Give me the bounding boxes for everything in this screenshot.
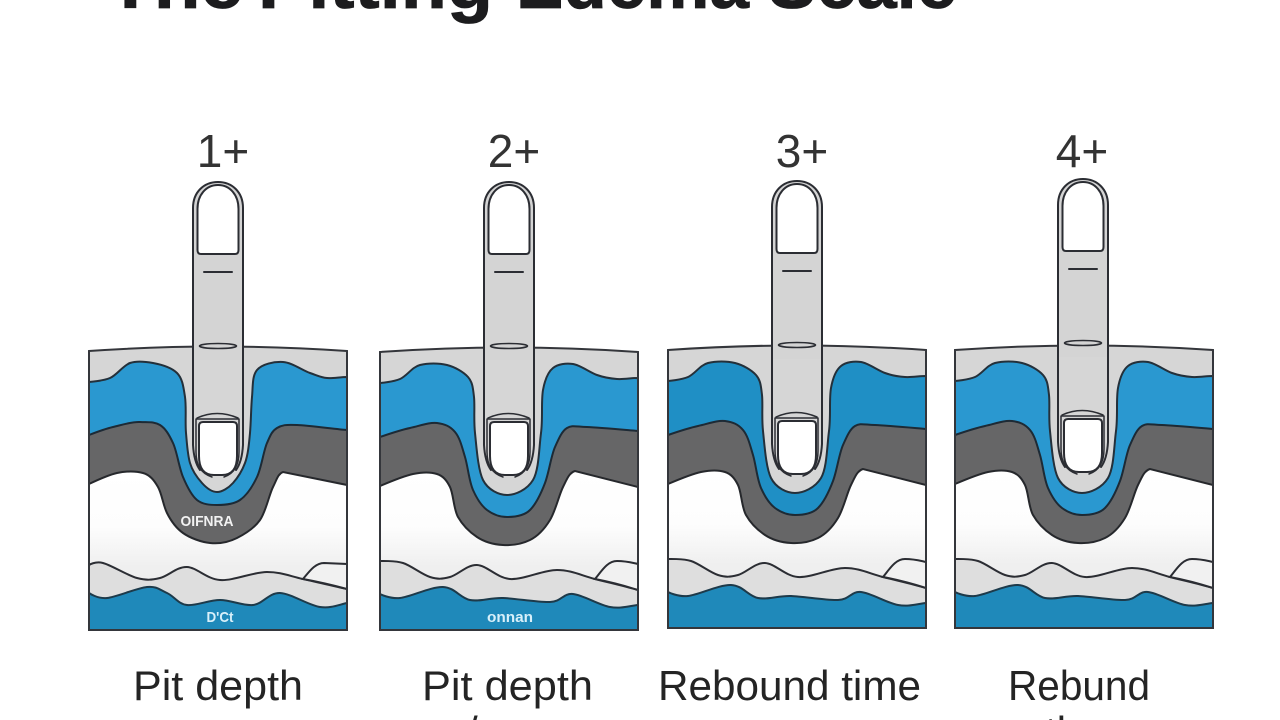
label 4+: Rebund xyxy=(1008,662,1150,709)
garbled pit caption 1+: OIFNRA xyxy=(180,513,234,530)
skin cross-section 4+ xyxy=(955,346,1213,628)
panel: grade 1+ xyxy=(89,125,347,709)
panel: grade 4+ xyxy=(955,125,1213,720)
pressing finger 2+ xyxy=(484,182,534,477)
skin cross-section 3+ xyxy=(668,346,926,628)
garbled base caption 2+: onnan xyxy=(487,609,533,626)
label 3+: Rebound time xyxy=(658,662,921,709)
panel: grade 2+ xyxy=(380,125,638,720)
grade number 4+: 4+ xyxy=(1056,125,1108,177)
pressing finger 1+ xyxy=(193,182,243,477)
pressing finger 3+ xyxy=(772,181,822,476)
label 1+: Pit depth xyxy=(133,662,303,709)
panel: grade 3+ xyxy=(658,125,926,709)
title xyxy=(107,0,957,24)
label 2+: Pit depth xyxy=(422,662,593,709)
garbled base caption 1+: D'Ct xyxy=(206,609,234,626)
grade number 2+: 2+ xyxy=(488,125,540,177)
skin cross-section 2+ xyxy=(380,348,638,630)
grade number 3+: 3+ xyxy=(776,125,828,177)
grade number 1+: 1+ xyxy=(197,125,249,177)
pressing finger 4+ xyxy=(1058,179,1108,474)
skin cross-section 1+ xyxy=(89,346,347,630)
